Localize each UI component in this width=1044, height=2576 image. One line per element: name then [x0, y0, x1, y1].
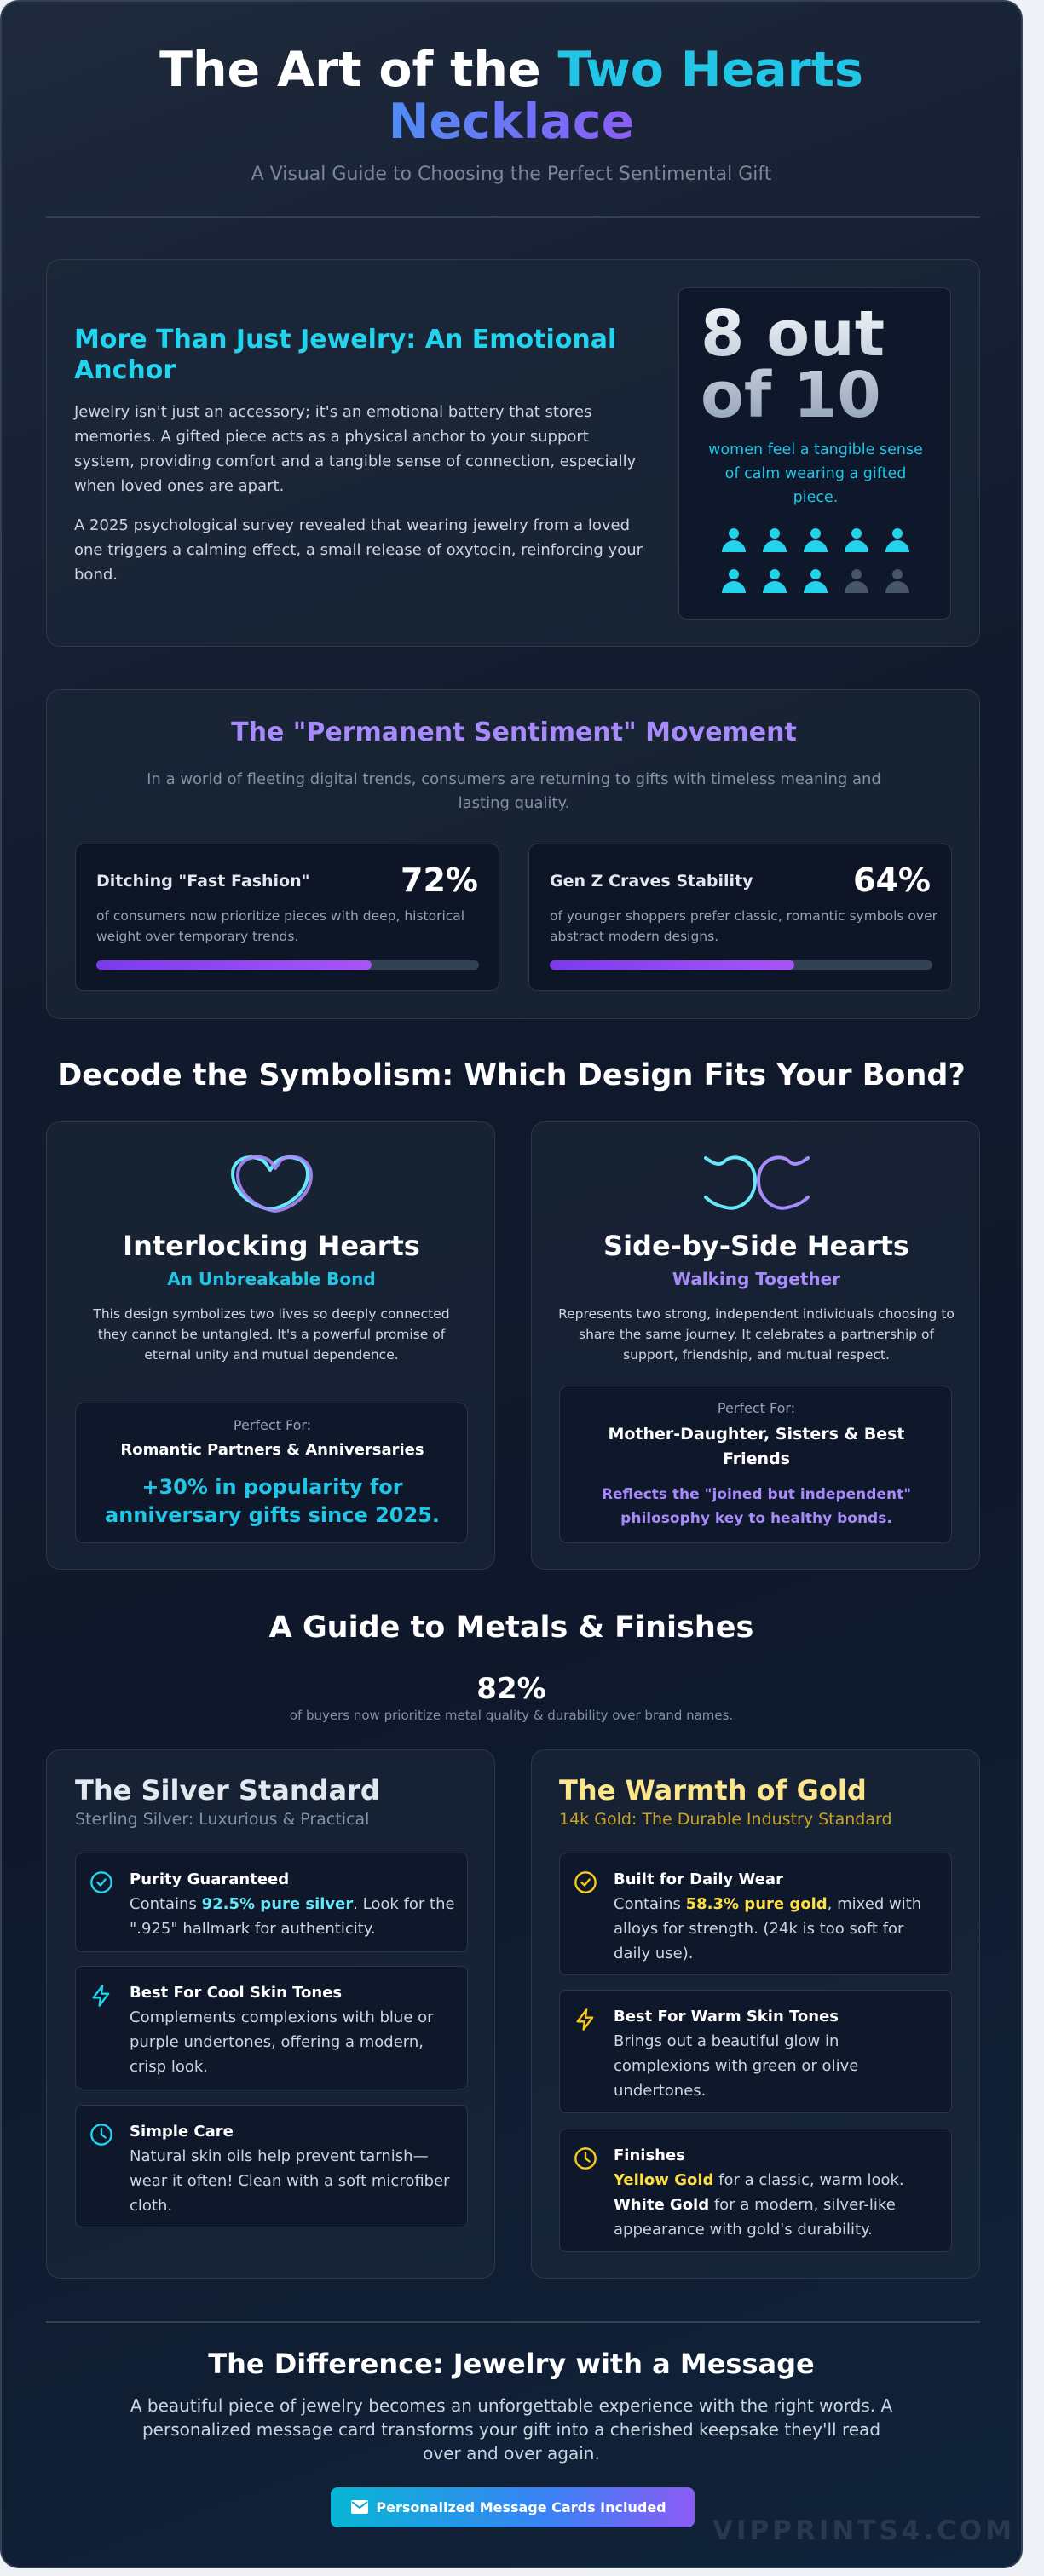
item: daily wear: Contains 58.3% pure gold, mixed with alloys for strength. (24k is too soft for daily use).: [614, 1895, 921, 1962]
item: purity: Purity Guaranteed: [130, 1870, 289, 1888]
heading: Side-by-Side Hearts: [603, 1230, 909, 1262]
subtitle: Walking Together: [672, 1269, 840, 1289]
stat box: 8 out of 10: 8 out: [701, 297, 885, 371]
item: simple care: [75, 2105, 468, 2227]
panel: interlocking hearts: [46, 1121, 495, 1570]
icon: interlocking hearts: [231, 1155, 313, 1213]
title: [159, 42, 863, 150]
callout: perfect for: Reflects the "joined but independent" philosophy key to healthy bonds.: [602, 1486, 911, 1527]
stat card: gen z: Gen Z Craves Stability: [550, 872, 753, 890]
callout: perfect for: Perfect For:: [718, 1400, 795, 1416]
stat: 82%: of buyers now prioritize metal quality & durability over brand names.: [290, 1708, 733, 1723]
button: message cards: [331, 2487, 695, 2527]
subtitle: Sterling Silver: Luxurious & Practical: [75, 1810, 369, 1829]
button: message cards: Personalized Message Cards Included: [376, 2499, 666, 2515]
callout: perfect for: +30% in popularity for anniversary gifts since 2025.: [105, 1475, 440, 1527]
stat box: 8 out of 10: women feel a tangible sense of calm wearing a gifted piece.: [708, 441, 923, 506]
item: finishes: Yellow Gold for a classic, warm look. White Gold for a modern, silver-like appearance with gold's durability.: [614, 2171, 904, 2239]
text block: Represents two strong, independent individuals choosing to share the same journey. It celebrates a partnership of support, friendship, and mutual respect.: [558, 1306, 955, 1363]
title: Necklace: [389, 94, 634, 150]
callout: perfect for: Romantic Partners & Anniversaries: [120, 1441, 424, 1459]
heading: metals: A Guide to Metals & Finishes: [269, 1611, 753, 1645]
callout: perfect for: Perfect For:: [234, 1417, 311, 1433]
item: warm skin: [559, 1990, 952, 2113]
panel: side-by-side hearts: [531, 1121, 980, 1570]
item: simple care: Simple Care: [130, 2123, 234, 2141]
item: daily wear: [559, 1853, 952, 1975]
heading: The Warmth of Gold: [559, 1774, 867, 1807]
heading: The "Permanent Sentiment" Movement: [231, 717, 797, 747]
text block: This design symbolizes two lives so deeply connected they cannot be untangled. It's a powerful promise of eternal unity and mutual dependence.: [93, 1306, 450, 1363]
item: warm skin: Best For Warm Skin Tones: [614, 2008, 839, 2026]
stat card: gen z: [528, 844, 952, 991]
item: cool skin: Best For Cool Skin Tones: [130, 1984, 342, 2002]
item: finishes: [559, 2129, 952, 2252]
stat box: 8 out of 10: of 10: [701, 359, 881, 432]
item: simple care: Natural skin oils help prevent tarnish—wear it often! Clean with a soft microfiber cloth.: [130, 2147, 450, 2215]
text block: In a world of fleeting digital trends, consumers are returning to gifts with timeless meaning and lasting quality.: [147, 770, 881, 812]
heading: The Silver Standard: [75, 1774, 380, 1807]
stat: 82%: [290, 1672, 733, 1723]
stat box: 8 out of 10: [678, 287, 951, 620]
panel: emotional anchor: [46, 259, 980, 647]
icon: envelope: [351, 2500, 368, 2514]
text block: Jewelry isn't just an accessory; it's an emotional battery that stores memories. A gifted piece acts as a physical anchor to your support system, providing comfort and a tangible sense of connection, especially when loved ones are apart. A 2025 psychological survey revealed that wearing jewelry from a loved one triggers a calming effect, a small release of oxytocin, reinforcing your bond.: [74, 403, 643, 584]
heading: More Than Just Jewelry: An Emotional Anchor: [74, 325, 616, 385]
item: purity: [75, 1853, 468, 1952]
heading: decode the symbolism: Decode the Symbolism: Which Design Fits Your Bond?: [57, 1058, 966, 1092]
callout: perfect for: Mother-Daughter, Sisters & Best Friends: [608, 1425, 905, 1468]
item: finishes: Finishes: [614, 2147, 685, 2164]
stat card: fast fashion: Ditching "Fast Fashion": [96, 872, 310, 890]
icon: side-by-side hearts: [704, 1155, 810, 1210]
item: daily wear: Built for Daily Wear: [614, 1870, 783, 1888]
icon: people grid: [722, 528, 909, 593]
item: purity: Contains 92.5% pure silver. Look for the ".925" hallmark for authenticity.: [130, 1895, 455, 1938]
stat card: gen z: 64%: [853, 862, 931, 899]
callout: perfect for: [75, 1403, 468, 1543]
panel: permanent sentiment: [46, 689, 980, 1019]
callout: perfect for: [559, 1386, 952, 1543]
watermark: VIPPRINTS4.COM: [712, 2515, 1015, 2546]
item: cool skin: [75, 1966, 468, 2089]
panel: silver: [46, 1749, 495, 2279]
stat card: fast fashion: [75, 844, 499, 991]
subtitle: A Visual Guide to Choosing the Perfect Sentimental Gift: [251, 164, 771, 185]
panel: gold: [531, 1749, 980, 2279]
stat card: gen z: of younger shoppers prefer classic, romantic symbols over abstract modern designs.: [550, 908, 937, 944]
stat: 82%: 82%: [476, 1672, 546, 1706]
stat card: fast fashion: 72%: [401, 862, 478, 899]
subtitle: 14k Gold: The Durable Industry Standard: [559, 1810, 892, 1829]
item: warm skin: Brings out a beautiful glow in complexions with green or olive undertones.: [614, 2032, 858, 2100]
heading: Interlocking Hearts: [123, 1230, 420, 1262]
title: The Art of the Two Hearts: [159, 42, 863, 98]
heading: the difference: The Difference: Jewelry with a Message: [208, 2348, 815, 2380]
bar chart: [96, 960, 479, 970]
text block: A beautiful piece of jewelry becomes an unforgettable experience with the right words. A personalized message card transforms your gift into a cherished keepsake they'll read over and over again.: [130, 2395, 892, 2464]
bar chart: [550, 960, 932, 970]
subtitle: An Unbreakable Bond: [167, 1269, 376, 1289]
item: cool skin: Complements complexions with blue or purple undertones, offering a modern, crisp look.: [130, 2008, 434, 2076]
stat card: fast fashion: of consumers now prioritize pieces with deep, historical weight over temporary trends.: [96, 908, 464, 944]
